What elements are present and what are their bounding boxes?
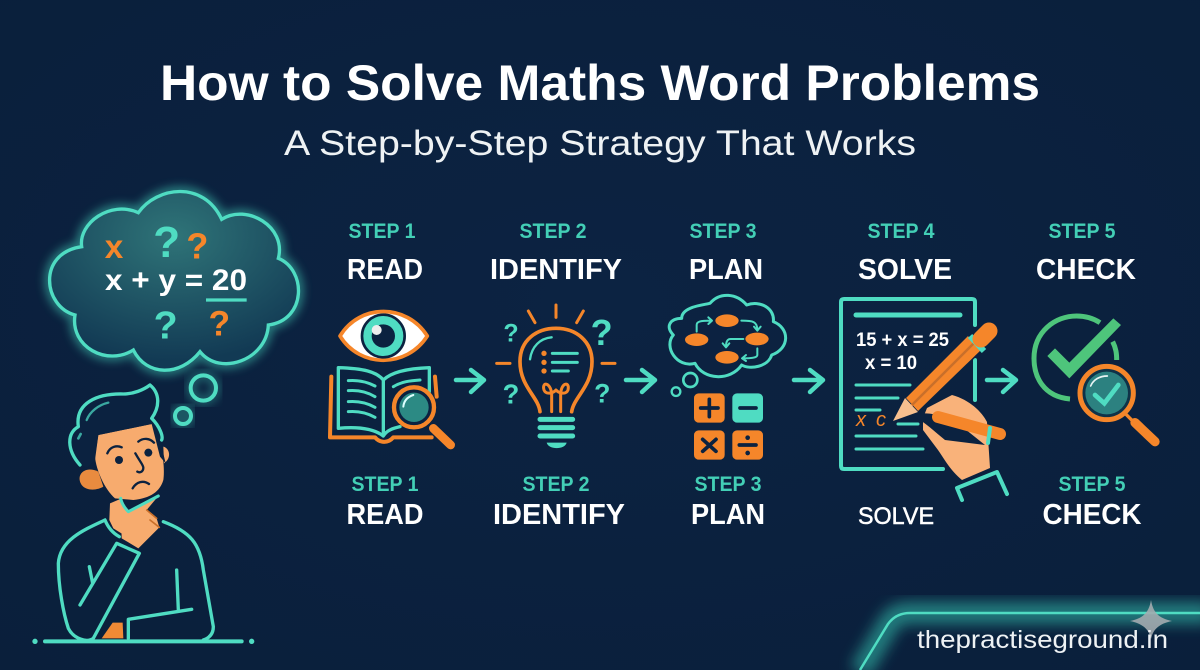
step labels bottom row: PLAN: [691, 499, 765, 531]
hair: [70, 385, 166, 467]
icon: light bulb: ?: [594, 379, 610, 409]
title: How to Solve Maths Word Problems: [160, 55, 1040, 111]
thought cloud with equation: x + y = 20: [105, 264, 247, 297]
eyes and mouth: [115, 456, 123, 464]
step labels bottom row: [346, 473, 1142, 531]
step headers top row: [347, 220, 1136, 286]
website text: thepractiseground.in: [917, 626, 1168, 654]
face: [95, 424, 164, 500]
icon: light bulb: [497, 305, 615, 448]
icon: worksheet, pencil and hand: 15 + x = 25: [856, 330, 949, 351]
neck: [109, 498, 127, 537]
arrow 3: [794, 370, 823, 392]
icon: plan cloud and operators: [669, 295, 786, 460]
step labels bottom row: SOLVE: [858, 503, 934, 530]
thought cloud with equation: ?: [186, 225, 208, 266]
step headers top row: STEP 4: [868, 220, 935, 243]
footer corner glow and website: [860, 600, 1200, 670]
step headers top row: STEP 5: [1048, 220, 1116, 243]
step headers top row: STEP 2: [520, 220, 586, 243]
torso outline: [58, 520, 213, 640]
step headers top row: STEP 1: [348, 220, 416, 243]
icon: worksheet, pencil and hand: [841, 299, 1007, 500]
ears: [80, 470, 103, 490]
thought cloud with equation: ?: [153, 218, 180, 267]
desk line: [45, 635, 242, 647]
thought cloud with equation: [50, 191, 298, 424]
step headers top row: STEP 3: [690, 220, 756, 243]
step labels bottom row: STEP 2: [522, 473, 590, 496]
icon: worksheet, pencil and hand: x = 10: [865, 353, 917, 374]
thought cloud with equation: x: [105, 229, 124, 266]
pencil: [905, 335, 982, 412]
step labels bottom row: STEP 5: [1058, 473, 1126, 496]
hand: [121, 496, 159, 548]
sparkle: [1130, 600, 1172, 639]
cuff: [957, 472, 1007, 500]
thinking person: [32, 385, 254, 644]
arrow 1: [456, 370, 484, 392]
icon: light bulb: ?: [591, 312, 613, 353]
icon: eye and book: [330, 311, 451, 445]
step headers top row: READ: [347, 254, 423, 286]
arrow 2: [626, 370, 655, 392]
step headers top row: CHECK: [1036, 254, 1136, 286]
subtitle: A Step-by-Step Strategy That Works: [284, 124, 916, 163]
step labels bottom row: STEP 3: [694, 473, 762, 496]
icon: light bulb: ?: [503, 378, 519, 409]
step labels bottom row: CHECK: [1042, 499, 1142, 531]
step headers top row: PLAN: [689, 254, 763, 286]
step labels bottom row: READ: [346, 499, 424, 531]
icon: light bulb: ?: [503, 320, 519, 348]
thought cloud with equation: ?: [154, 304, 178, 348]
hand: [923, 395, 990, 480]
icon: checkmark and magnifier: [1034, 316, 1155, 442]
step labels bottom row: IDENTIFY: [493, 499, 625, 531]
step labels bottom row: STEP 1: [352, 473, 419, 496]
thought cloud with equation: ?: [209, 305, 230, 344]
step headers top row: IDENTIFY: [490, 254, 622, 286]
step headers top row: SOLVE: [858, 254, 952, 286]
lower hand: [102, 623, 123, 638]
worksheet: [841, 299, 975, 469]
arrow 4: [987, 370, 1016, 392]
icon: worksheet, pencil and hand: x c: [855, 409, 886, 431]
